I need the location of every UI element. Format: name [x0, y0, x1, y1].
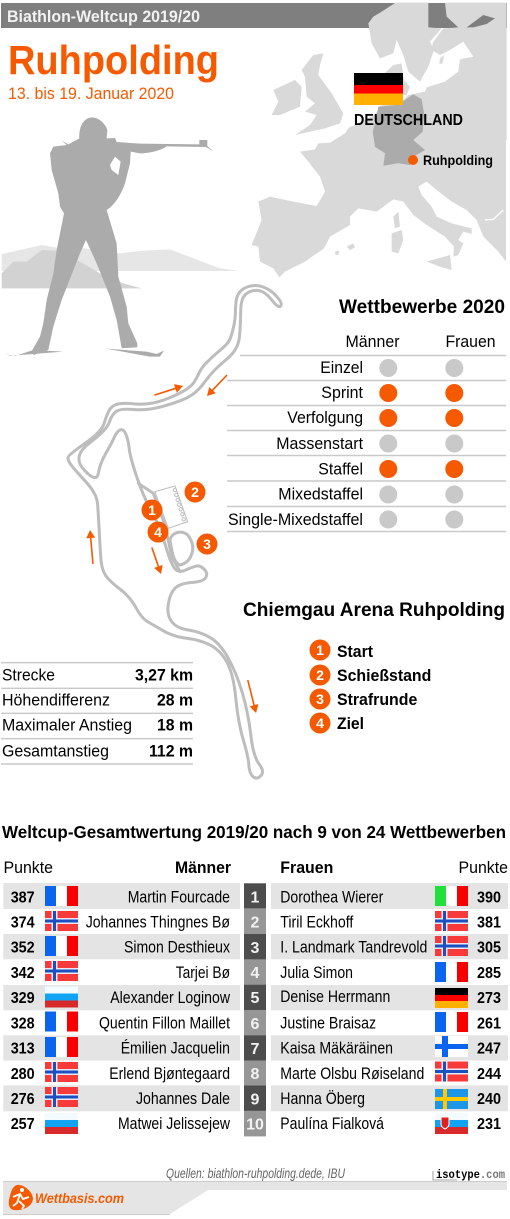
women row 4: Julia Simon [280, 964, 353, 982]
men row 4: Tarjei Bø [176, 964, 230, 982]
date: 13. bis 19. Januar 2020 [8, 84, 174, 103]
isotype credit: isotype.com [436, 1168, 505, 1182]
women row 7 [280, 1036, 501, 1058]
row: Einzel: Einzel [320, 359, 363, 377]
row stripes [3, 883, 508, 1111]
course badge 3 [196, 534, 218, 554]
stat: Maximaler Anstieg: Maximaler Anstieg [2, 717, 132, 735]
men row 8 [11, 1062, 230, 1083]
course badge 2 [184, 482, 206, 502]
stat: Strecke: 3,27 km [135, 666, 193, 684]
rank column: 4 [251, 965, 260, 982]
footer band [3, 1182, 507, 1214]
men row 6: Quentin Fillon Maillet [99, 1014, 230, 1032]
stat: Gesamtanstieg [2, 743, 193, 761]
men row 8: 280 [11, 1066, 35, 1083]
course map [68, 286, 281, 778]
legend: Ziel: Ziel [337, 715, 364, 733]
location marker [408, 155, 418, 165]
rank column: 10 [246, 1116, 264, 1134]
column headers: Punkte [4, 859, 53, 877]
Germany highlight [373, 94, 425, 166]
row: Verfolgung [287, 409, 463, 427]
shooting range [155, 486, 188, 528]
icon: Wettbasis logo [9, 1185, 33, 1210]
panel: competitions [227, 297, 506, 532]
men row 9 [11, 1087, 230, 1108]
stat: Gesamtanstieg: 112 m [149, 743, 193, 761]
rank column: 7 [251, 1041, 260, 1058]
women row 2: Tiril Eckhoff [280, 914, 354, 932]
sources: Quellen: biathlon-ruhpolding.dede, IBU [166, 1166, 345, 1181]
legend: Schießstand: Schießstand [337, 667, 431, 685]
men row 6: 328 [11, 1015, 35, 1032]
men row 7: 313 [11, 1040, 35, 1058]
men row 5: 329 [11, 990, 35, 1007]
heading: Wettbewerbe 2020 [339, 297, 505, 318]
rule lines [1, 663, 193, 764]
mountains [2, 245, 240, 288]
rank column [244, 883, 266, 1136]
arrow [153, 382, 184, 399]
women row 10: 231 [477, 1116, 501, 1133]
women row 1 [280, 886, 501, 906]
course badge 2: 2 [191, 484, 199, 500]
column headers: Frauen [446, 333, 496, 351]
women row 5 [280, 988, 501, 1008]
row: Staffel: Staffel [318, 460, 363, 478]
row: Sprint [321, 384, 463, 402]
women row 6: 261 [477, 1015, 501, 1032]
legend: Schießstand: 2 [316, 667, 324, 683]
men row 4: 342 [11, 965, 35, 982]
label: Deutschland: DEUTSCHLAND [354, 112, 463, 129]
men row 2 [11, 911, 230, 932]
rank column: 8 [251, 1066, 260, 1083]
rank column: 1 [251, 890, 260, 906]
men row 7 [11, 1037, 230, 1058]
rule lines [227, 356, 506, 532]
panel: course stats [1, 663, 193, 764]
men row 5: Alexander Loginow [110, 989, 230, 1007]
row: Einzel [320, 359, 463, 377]
women row 4 [280, 962, 501, 982]
rank column: 6 [251, 1016, 260, 1033]
biathlete silhouette [5, 117, 213, 357]
stat: Strecke: Strecke [2, 666, 55, 684]
men row 2: 374 [11, 914, 35, 932]
stat: Höhendifferenz: 28 m [157, 692, 193, 710]
women row 8 [280, 1062, 501, 1083]
women row 8: 244 [477, 1066, 501, 1083]
women row 3: I. Landmark Tandrevold [280, 939, 427, 957]
course badge 3: 3 [203, 536, 211, 552]
course badge 1 [142, 500, 162, 520]
legend: Start: 1 [316, 642, 324, 658]
legend: Strafrunde: 3 [316, 691, 324, 707]
stat: Höhendifferenz: Höhendifferenz [2, 692, 110, 710]
rank column: 9 [251, 1092, 260, 1108]
course badge 4: 4 [154, 524, 162, 540]
legend: Start: Start [337, 643, 374, 661]
panel: standings table [3, 859, 508, 1136]
label: Ruhpolding: Ruhpolding [423, 153, 493, 168]
panel: arena legend [243, 600, 505, 734]
legend: Strafrunde [310, 688, 417, 710]
men row 10: Matwei Jelissejew [118, 1115, 230, 1133]
legend: Ziel [310, 712, 364, 734]
header bar [1, 3, 507, 28]
women row 2: 381 [477, 914, 501, 932]
women row 1: 390 [477, 889, 501, 906]
men row 4 [11, 961, 230, 982]
women row 6: Justine Braisaz [280, 1014, 376, 1032]
header bar: Biathlon-Weltcup 2019/20 [7, 7, 200, 26]
women row 4: 285 [477, 965, 501, 982]
women row 10 [280, 1113, 501, 1134]
stat: Maximaler Anstieg [2, 717, 193, 735]
women row 9: 240 [477, 1091, 501, 1108]
rank column: 5 [251, 990, 260, 1007]
men row 3 [11, 936, 230, 957]
men row 1 [11, 886, 230, 906]
women row 9 [280, 1089, 501, 1109]
stat: Maximaler Anstieg: 18 m [157, 717, 193, 735]
rank column: 2 [251, 915, 260, 932]
row: Massenstart [276, 434, 463, 453]
standings heading: Weltcup-Gesamtwertung 2019/20 nach 9 von 24 Wettbewerben [2, 822, 506, 842]
row: Mixedstaffel [278, 486, 463, 504]
column headers: Männer [175, 859, 232, 877]
men row 6 [11, 1012, 230, 1032]
women row 7: Kaisa Mäkäräinen [280, 1040, 393, 1058]
legend: Strafrunde: Strafrunde [337, 691, 417, 709]
stat: Höhendifferenz [2, 692, 193, 710]
stat: Strecke [2, 666, 193, 684]
women row 10: Paulína Fialková [280, 1115, 384, 1133]
heading: Chiemgau Arena Ruhpolding [243, 600, 505, 621]
stat: Gesamtanstieg: Gesamtanstieg [2, 743, 109, 761]
women row 5: 273 [477, 990, 501, 1007]
women row 3: 305 [477, 940, 501, 957]
men row 1: 387 [11, 889, 35, 906]
brand name: Wettbasis.com [35, 1191, 124, 1206]
women row 8: Marte Olsbu Røiseland [280, 1065, 424, 1083]
row: Verfolgung: Verfolgung [287, 409, 363, 427]
legend: Schießstand [310, 664, 431, 686]
column headers [4, 859, 508, 877]
rank column: 3 [251, 940, 260, 957]
men row 9: 276 [11, 1091, 35, 1108]
men row 10: 257 [11, 1116, 35, 1133]
column headers [346, 333, 496, 351]
women row 5: Denise Herrmann [280, 988, 390, 1006]
course badge 1: 1 [148, 502, 156, 518]
men row 2: Johannes Thingnes Bø [86, 914, 230, 932]
women row 9: Hanna Öberg [280, 1090, 365, 1108]
women row 1: Dorothea Wierer [280, 888, 384, 906]
arrow [243, 679, 260, 714]
men row 9: Johannes Dale [136, 1090, 230, 1108]
arrow [148, 546, 165, 575]
women row 7: 247 [477, 1040, 501, 1058]
legend: Start [310, 640, 374, 661]
map of Europe [252, 3, 507, 277]
women row 6 [280, 1012, 501, 1032]
row: Massenstart: Massenstart [276, 435, 363, 453]
arrow [86, 530, 97, 564]
women row 2 [280, 911, 501, 932]
men row 7: Émilien Jacquelin [121, 1038, 230, 1058]
course badge 4 [148, 522, 168, 542]
row: Single-Mixedstaffel: Single-Mixedstaffel [228, 511, 363, 529]
legend: Ziel: 4 [316, 715, 324, 731]
row: Staffel [318, 460, 463, 478]
row: Single-Mixedstaffel [228, 510, 463, 529]
men row 3: 352 [11, 940, 35, 957]
arrow [204, 372, 230, 399]
title: Ruhpolding [8, 37, 219, 83]
column headers: Punkte [458, 859, 508, 877]
men row 10 [11, 1113, 230, 1134]
column headers: Männer [346, 333, 400, 351]
column headers: Frauen [280, 859, 333, 877]
women row 3 [280, 936, 501, 957]
row: Sprint: Sprint [321, 384, 363, 402]
men row 5 [11, 986, 230, 1008]
men row 1: Martin Fourcade [128, 888, 230, 906]
row: Mixedstaffel: Mixedstaffel [278, 486, 363, 504]
men row 3: Simon Desthieux [124, 939, 230, 957]
men row 8: Erlend Bjøntegaard [109, 1065, 230, 1083]
icon: German flag [354, 73, 403, 105]
